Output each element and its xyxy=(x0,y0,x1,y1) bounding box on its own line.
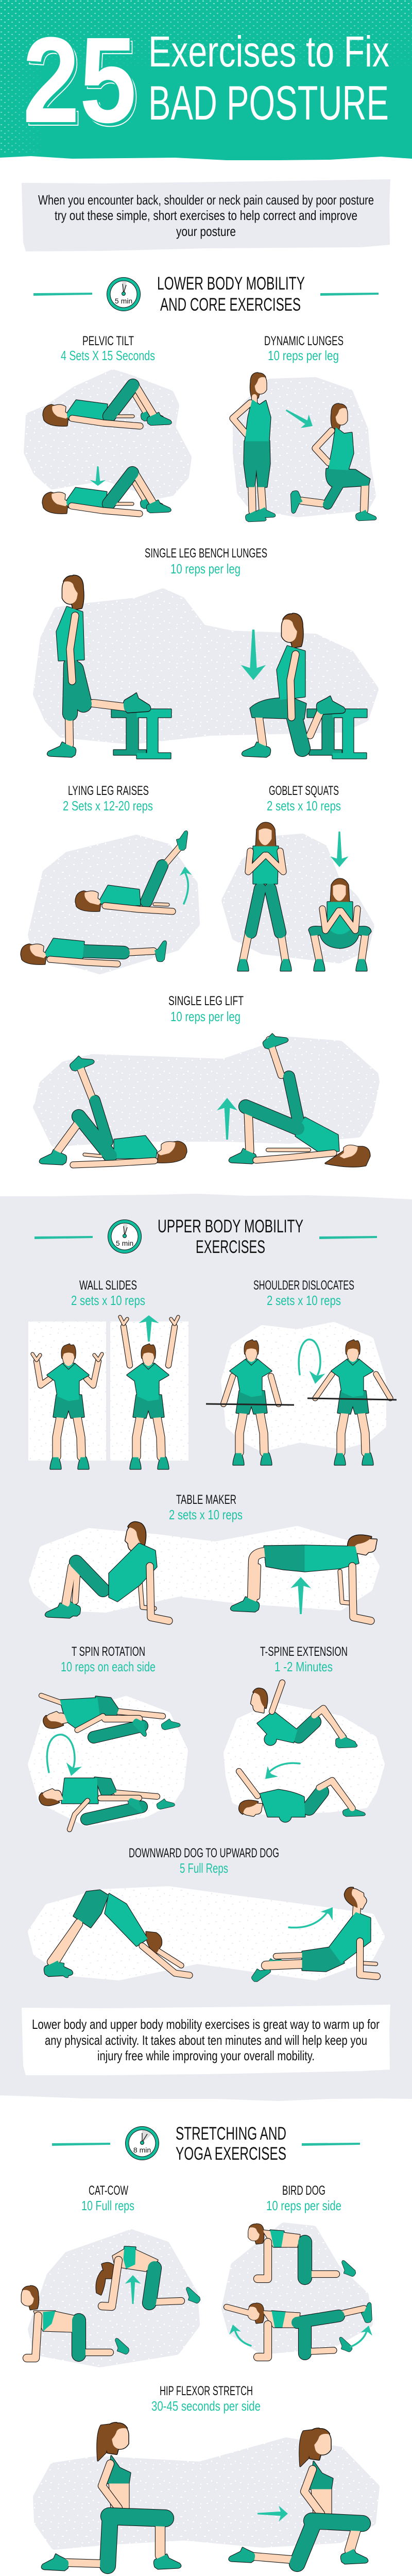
background blob xyxy=(226,2227,369,2350)
exercise: lying leg raises xyxy=(21,784,196,970)
heading text: EXERCISES xyxy=(196,1237,265,1257)
name: CAT-COW xyxy=(89,2183,128,2198)
icon: 5 minute clock: 5 min xyxy=(116,1239,133,1247)
arrow xyxy=(217,1098,237,1140)
exercise: goblet squats xyxy=(226,784,371,971)
name: PELVIC TILT xyxy=(82,334,134,348)
heading text xyxy=(176,2124,286,2164)
reps: 10 reps per leg xyxy=(268,348,339,363)
reps: 2 sets x 10 reps xyxy=(71,1293,145,1308)
exercise: hip flexor stretch xyxy=(37,2384,375,2570)
icon: 5 minute clock xyxy=(108,1219,142,1253)
name: BIRD DOG xyxy=(282,2183,325,2198)
exercise: dynamic lunges xyxy=(233,334,376,521)
icon: 8 minute clock: 8 min xyxy=(133,2146,151,2154)
arrow: curved left xyxy=(227,2323,251,2346)
reps: 2 sets x 10 reps xyxy=(169,1507,243,1522)
header band xyxy=(0,0,412,160)
reps: 2 Sets x 12-20 reps xyxy=(63,798,153,814)
name: TABLE MAKER xyxy=(176,1493,236,1507)
figure: upward dog xyxy=(249,1884,377,1982)
heading text: AND CORE EXERCISES xyxy=(160,295,301,315)
figure: cat xyxy=(96,2247,201,2307)
icon: 5 minute clock xyxy=(107,277,141,311)
icon: 8 minute clock xyxy=(125,2126,159,2160)
exercise: bird dog xyxy=(226,2183,374,2357)
section panel: upper body background xyxy=(0,1194,412,2101)
name: DOWNWARD DOG TO UPWARD DOG xyxy=(129,1846,279,1860)
figure: seated xyxy=(45,1522,169,1621)
exercise: single leg bench lunges xyxy=(37,546,374,758)
arrow xyxy=(90,466,106,486)
figure: bar low xyxy=(206,1340,294,1465)
arrow xyxy=(241,630,266,680)
figure: arms raised xyxy=(120,1317,178,1469)
figure: lunge xyxy=(291,404,376,520)
background blob xyxy=(226,838,370,959)
callout text: injury free while improving your overall mobility. xyxy=(97,2048,315,2063)
name: WALL SLIDES xyxy=(79,1278,137,1293)
wall panel left xyxy=(28,1321,106,1461)
figure: arms bent xyxy=(32,1344,102,1469)
background blob xyxy=(237,381,372,513)
figure: standing xyxy=(233,373,275,521)
figure: extension top xyxy=(251,1683,357,1748)
heading text xyxy=(158,1216,303,1257)
figure: leg raised xyxy=(76,829,188,911)
name: LYING LEG RAISES xyxy=(68,784,149,798)
background blob xyxy=(37,2442,375,2546)
figure: standing squat start xyxy=(238,823,291,971)
arrow: loop xyxy=(47,1735,82,1778)
reps: 10 reps per side xyxy=(266,2198,341,2213)
heading text: STRETCHING AND xyxy=(176,2124,286,2144)
background blob xyxy=(32,2233,196,2363)
background blob xyxy=(28,374,187,495)
name: T-SPINE EXTENSION xyxy=(260,1645,348,1659)
figure: lowered with bench xyxy=(242,614,367,758)
figure: legs down xyxy=(21,939,167,964)
figure: pelvic tilt down xyxy=(43,473,170,514)
background blob xyxy=(33,1530,375,1608)
name: GOBLET SQUATS xyxy=(269,784,339,798)
wall panel right xyxy=(110,1321,188,1461)
name: SHOULDER DISLOCATES xyxy=(253,1278,354,1293)
figure: extension bottom xyxy=(239,1771,365,1822)
figure: bird dog start xyxy=(249,2224,357,2279)
section heading: upper body xyxy=(35,1216,377,1257)
name: SINGLE LEG LIFT xyxy=(168,994,244,1008)
figure: bar wide xyxy=(307,1340,397,1465)
arrow xyxy=(330,832,349,867)
section heading: lower body xyxy=(33,274,379,315)
reps: 2 sets x 10 reps xyxy=(267,798,341,814)
arrow: curved xyxy=(289,1903,339,1927)
exercise: wall slides xyxy=(28,1278,188,1469)
reps: 10 reps per leg xyxy=(170,1009,241,1024)
figure: downward dog xyxy=(44,1890,190,1979)
figure: hip flexor left xyxy=(42,2423,181,2570)
figure: pelvic tilt up xyxy=(43,385,171,426)
reps: 10 Full reps xyxy=(81,2198,134,2213)
exercise: cat-cow xyxy=(22,2183,201,2363)
exercise: table maker xyxy=(33,1493,376,1621)
intro box xyxy=(22,179,390,251)
arrow: loop xyxy=(299,1340,325,1385)
title number 25: 25 xyxy=(25,15,139,151)
reps: 10 reps per leg xyxy=(170,561,241,577)
arrow xyxy=(282,403,317,433)
figure: table top xyxy=(231,1535,376,1621)
reps: 2 sets x 10 reps xyxy=(267,1293,341,1308)
exercise: downward dog to upward dog xyxy=(32,1846,381,1982)
background blob xyxy=(225,1326,382,1448)
figure: bridge leg lift high xyxy=(229,1030,370,1166)
name: DYNAMIC LUNGES xyxy=(264,334,344,348)
heading text: YOGA EXERCISES xyxy=(176,2144,286,2164)
arrow: curved up xyxy=(179,866,192,904)
reps: 1 -2 Minutes xyxy=(274,1659,333,1674)
figure: cow xyxy=(22,2286,130,2358)
title number 25: 25 xyxy=(23,12,136,148)
background blob xyxy=(37,592,374,740)
name: HIP FLEXOR STRETCH xyxy=(160,2384,253,2398)
background blob xyxy=(32,1890,381,1976)
reps: 30-45 seconds per side xyxy=(151,2398,261,2414)
background blob xyxy=(228,1706,381,1810)
heading text: LOWER BODY MOBILITY xyxy=(157,274,305,294)
section heading: stretching xyxy=(52,2124,360,2164)
name: T SPIN ROTATION xyxy=(72,1645,145,1659)
exercise: pelvic tilt xyxy=(28,334,187,514)
exercise: shoulder dislocates xyxy=(206,1278,397,1465)
figure: hip flexor right xyxy=(229,2429,368,2564)
callout box: warm up xyxy=(22,2005,390,2075)
figure: squat down xyxy=(309,879,371,971)
figure: rotation bottom xyxy=(38,1777,175,1829)
background blob xyxy=(32,839,196,970)
callout text xyxy=(32,2016,380,2063)
intro text: your posture xyxy=(176,224,236,239)
arrow xyxy=(139,1315,159,1342)
name: SINGLE LEG BENCH LUNGES xyxy=(145,546,267,561)
figure: standing with bench xyxy=(47,576,171,758)
intro text xyxy=(38,192,374,239)
heading text xyxy=(157,274,305,315)
figure: bird dog extended xyxy=(227,2303,372,2357)
exercise: single leg lift xyxy=(37,994,375,1166)
figure: leg lift low xyxy=(40,1052,186,1165)
background blob xyxy=(32,1700,184,1822)
exercise: t-spine extension xyxy=(228,1645,381,1822)
arrow xyxy=(125,2275,141,2304)
arrow: curved left xyxy=(260,1763,300,1784)
heading text: UPPER BODY MOBILITY xyxy=(158,1216,303,1236)
arrow xyxy=(290,1577,311,1614)
exercise: t spin rotation xyxy=(32,1645,184,1829)
figure: rotation top xyxy=(41,1696,180,1737)
arrow: curved right xyxy=(351,2324,374,2347)
icon: 5 minute clock: 5 min xyxy=(115,297,132,305)
arrow xyxy=(258,2506,288,2521)
title number 25: 25 xyxy=(23,12,136,148)
reps: 10 reps on each side xyxy=(61,1659,156,1674)
background blob xyxy=(37,1041,375,1143)
reps: 4 Sets X 15 Seconds xyxy=(61,348,155,363)
reps: 5 Full Reps xyxy=(180,1860,228,1876)
